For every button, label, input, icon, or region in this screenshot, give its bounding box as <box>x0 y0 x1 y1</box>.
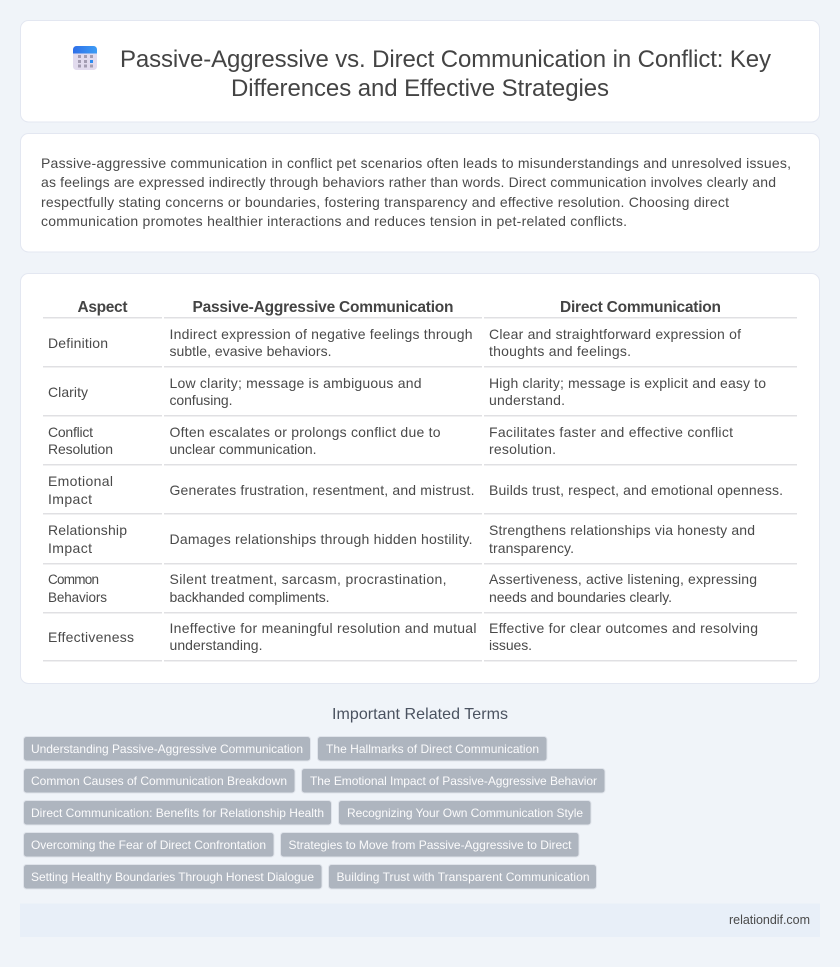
tag row 5 <box>24 864 596 889</box>
row: emotional impact <box>48 473 783 507</box>
title: Differences and Effective Strategies <box>231 75 609 102</box>
row: clarity: confusing. <box>170 392 232 408</box>
footer site name: relationdif.com <box>729 913 810 927</box>
row: conflict resolution: Often escalates or prolongs conflict due to <box>170 424 441 440</box>
title: Passive-Aggressive vs. Direct Communication in Conflict: Key <box>120 46 771 73</box>
heading: important related terms: Important Related Terms <box>332 706 508 723</box>
row: definition: Definition <box>48 335 108 351</box>
tag row 1 <box>24 736 547 761</box>
tag row 5: Setting Healthy Boundaries Through Honest Dialogue <box>31 870 314 884</box>
row: conflict resolution: unclear communication. <box>170 441 316 457</box>
intro paragraph: respectfully stating concerns or boundaries, fostering transparency and effective resolution. Choosing direct <box>41 194 729 210</box>
row: clarity: understand. <box>489 392 565 408</box>
row: common behaviors <box>48 571 757 605</box>
row: relationship impact: Strengthens relationships via honesty and <box>489 522 755 538</box>
row: conflict resolution: resolution. <box>489 441 556 457</box>
row: clarity <box>48 375 766 408</box>
tag row 4: Overcoming the Fear of Direct Confrontation <box>31 838 266 852</box>
row: effectiveness <box>48 620 758 653</box>
row: definition: Clear and straightforward expression of <box>489 326 741 342</box>
row: effectiveness: Effectiveness <box>48 629 134 645</box>
panel: comparison table <box>20 274 820 684</box>
row: effectiveness: Ineffective for meaningful resolution and mutual <box>170 620 476 636</box>
table header: Direct Communication <box>560 299 721 316</box>
tag row 2: Common Causes of Communication Breakdown <box>31 774 287 788</box>
row: common behaviors: Silent treatment, sarcasm, procrastination, <box>170 571 446 587</box>
tag row 2 <box>24 768 605 793</box>
row: relationship impact: transparency. <box>489 540 574 556</box>
row: conflict resolution <box>48 424 733 457</box>
row: common behaviors: needs and boundaries clearly. <box>489 589 672 605</box>
row: relationship impact <box>48 522 755 556</box>
tag row 4 <box>24 832 579 857</box>
row: conflict resolution: Resolution <box>48 441 113 457</box>
row: common behaviors: backhanded compliments. <box>170 589 330 605</box>
row: common behaviors: Common <box>48 572 99 587</box>
tag row 5: Building Trust with Transparent Communication <box>336 870 590 884</box>
row: emotional impact: Impact <box>48 491 92 507</box>
row: conflict resolution: Facilitates faster and effective conflict <box>489 424 733 440</box>
row: emotional impact: Builds trust, respect, and emotional openness. <box>489 482 783 498</box>
tag row 3 <box>24 800 591 825</box>
table header: Aspect <box>78 299 128 316</box>
icon: calendar <box>73 46 97 70</box>
row: relationship impact: Relationship <box>48 522 127 538</box>
row: common behaviors: Behaviors <box>48 590 107 605</box>
related term tags <box>24 736 605 889</box>
row: definition: subtle, evasive behaviors. <box>170 343 332 359</box>
panel: title header <box>20 20 820 122</box>
row: relationship impact: Impact <box>48 540 92 556</box>
row: relationship impact: Damages relationships through hidden hostility. <box>170 531 472 547</box>
intro paragraph <box>41 155 791 229</box>
title <box>120 46 771 102</box>
table header <box>78 299 721 316</box>
row: clarity: Clarity <box>48 384 88 400</box>
tag row 4: Strategies to Move from Passive-Aggressive to Direct <box>288 838 572 852</box>
row: conflict resolution: Conflict <box>48 424 93 440</box>
row: effectiveness: issues. <box>489 637 532 653</box>
row: emotional impact: Generates frustration, resentment, and mistrust. <box>170 482 474 498</box>
row: effectiveness: Effective for clear outcomes and resolving <box>489 620 758 636</box>
intro paragraph: communication promotes healthier interactions and reduces tension in pet-related conflicts. <box>41 213 627 229</box>
tag row 3: Direct Communication: Benefits for Relationship Health <box>31 806 324 820</box>
row: emotional impact: Emotional <box>48 473 113 489</box>
table header: Passive-Aggressive Communication <box>192 299 454 316</box>
tag row 3: Recognizing Your Own Communication Style <box>347 806 583 820</box>
intro paragraph: Passive-aggressive communication in conflict pet scenarios often leads to misunderstandings and unresolved issues, <box>41 155 791 171</box>
tag row 2: The Emotional Impact of Passive-Aggressive Behavior <box>310 774 597 788</box>
row: definition: thoughts and feelings. <box>489 343 631 359</box>
intro paragraph: as feelings are expressed indirectly through behaviors rather than words. Direct communication involves clearly and <box>41 174 776 190</box>
row: definition: Indirect expression of negative feelings through <box>170 326 472 342</box>
row: clarity: Low clarity; message is ambiguous and <box>170 375 422 391</box>
tag row 1: Understanding Passive-Aggressive Communication <box>31 742 303 756</box>
table rules <box>43 317 797 662</box>
panel: introduction <box>20 134 820 252</box>
row: definition <box>48 326 741 359</box>
footer <box>20 904 820 937</box>
tag row 1: The Hallmarks of Direct Communication <box>326 742 539 756</box>
row: effectiveness: understanding. <box>170 637 262 653</box>
row: clarity: High clarity; message is explicit and easy to <box>489 375 766 391</box>
row: common behaviors: Assertiveness, active listening, expressing <box>489 571 757 587</box>
